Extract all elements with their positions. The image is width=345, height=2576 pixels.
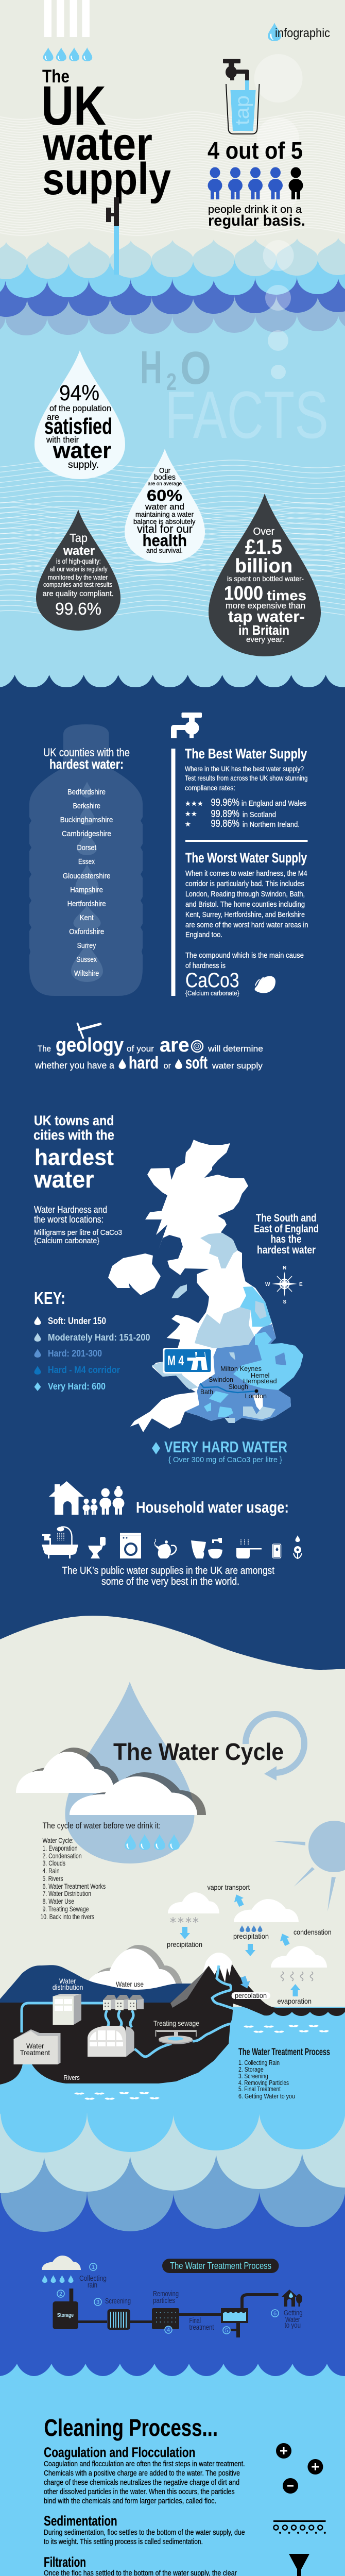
fact drop: bottled water cost: billion [235, 555, 292, 577]
text: worst water description: and Bristol. The home counties including [185, 901, 305, 909]
step 4: removing particles: particles [153, 2296, 175, 2305]
callout: very hard water: { Over 300 mg of CaCo3 per litre } [168, 1455, 282, 1464]
steam squiggles [281, 1972, 313, 1981]
four water drops [43, 47, 92, 61]
fact drop: bodies 60% water: health [142, 531, 187, 550]
icon: filter funnel [289, 2554, 309, 2576]
text: cycle of water list: 1. Evaporation [42, 1844, 77, 1852]
step 1: collecting rain [42, 2256, 107, 2290]
legend: key: KEY: [34, 1289, 65, 1308]
labels: condensation [294, 1928, 332, 1936]
block: coagulation: other dissolved particles in the water. When this occurs, the particles [44, 2488, 235, 2496]
icon: title tap and water stream [106, 197, 119, 275]
panel: best and worst water supply: Test results from across the UK show stunning [185, 774, 308, 782]
rising bubbles [254, 54, 303, 379]
text: geology statement: The [38, 1044, 51, 1054]
text: cycle of water list: 4. Rain [42, 1867, 60, 1875]
building: water distribution: Water [59, 1977, 76, 1985]
large scallop rows [0, 2069, 345, 2232]
text: worst water description: are some of the worst hard water areas in [185, 921, 308, 929]
heading: household water usage: Household water usage: [136, 1498, 289, 1516]
title pill [162, 2259, 279, 2273]
text: cycle of water list: 2. Condensation [42, 1852, 81, 1860]
labels [167, 1883, 332, 2005]
stat: 4 out of 5: 4 out of 5 [208, 137, 303, 164]
arrows [180, 1892, 301, 1996]
key item: M4 corridor: Hard - M4 corridor [48, 1365, 120, 1375]
compliance rates with stars: ★ [185, 820, 191, 828]
text: geology statement: of your [127, 1044, 154, 1054]
fact drop: bodies 60% water: bodies [154, 473, 176, 482]
list: counties: Essex [78, 857, 95, 866]
navy section scalloped top [0, 675, 345, 690]
heading: H2O FACTS [140, 342, 329, 452]
text: worst water description: When it comes to water hardness, the M4 [185, 870, 307, 878]
fact drop: 94% satisfied: with their [46, 435, 79, 445]
block: coagulation: charge of these chemicals neutralizes the negative charge of dirt and [44, 2479, 239, 2487]
text: geology statement: geology [56, 1035, 124, 1056]
text: worst water description: of hardness is [185, 962, 226, 970]
fact drop: bodies 60% water: are on average [148, 481, 182, 487]
fact drop: bottled water cost: tap water- [228, 607, 305, 625]
text: cycle of water list: The cycle of water before we drink it: [42, 1821, 161, 1831]
fact drop: bodies 60% water: vital for our [137, 522, 193, 535]
clouds over title drop [16, 1748, 206, 1815]
title: supply [42, 154, 171, 204]
key item: moderately hard: Moderately Hard: 151-200 [48, 1332, 150, 1343]
fact drop: bottled water cost: is spent on bottled water- [227, 574, 304, 583]
step 3: screening [94, 2297, 131, 2330]
list: counties: Sussex [76, 955, 97, 964]
compliance rates with stars: ★ [191, 810, 197, 818]
list: counties: Buckinghamshire [60, 816, 113, 824]
icon: sedimentation [273, 2520, 326, 2534]
block: sedimentation: to its weight. This settling process is called sedimentation. [44, 2538, 203, 2546]
land and mountain [0, 1955, 345, 2084]
block: coagulation: Coagulation and Flocculation [44, 2445, 196, 2460]
text: cycle of water list: 10. Back into the rivers [41, 1912, 94, 1921]
icon: compass: E [299, 1282, 303, 1287]
building: sewage works [88, 2026, 134, 2057]
block: coagulation [44, 2445, 245, 2505]
block: sedimentation [44, 2513, 245, 2546]
step 1: collecting rain: Collecting [79, 2274, 107, 2283]
fact drop: bottled water cost: times [267, 588, 306, 603]
icon: compass: W [265, 1282, 270, 1287]
text: cycle of water list: 7. Water Distribution [42, 1889, 91, 1897]
heading: UK towns hardest water: cities with the [33, 1127, 114, 1143]
fact drop: 94% satisfied [34, 350, 125, 479]
fact drop: bodies 60% water: Our [159, 466, 170, 475]
icon: flower and drop [294, 1535, 302, 1558]
fact drop: 94% satisfied: supply. [68, 460, 99, 470]
stat: 4 out of 5: regular basis. [208, 212, 305, 229]
icon: compass [265, 1265, 303, 1305]
text: geology statement: hard [129, 1053, 159, 1072]
panel: best and worst water supply: Where in the UK has the best water supply? [185, 765, 304, 773]
heading: UK counties: hardest water: [49, 756, 124, 772]
text: water treatment process list: 2. Storage [238, 2065, 264, 2073]
city labels: Hemel [251, 1371, 270, 1379]
small drops inside bottle [71, 782, 103, 982]
mountain snow cap and highlight [170, 1953, 232, 2008]
text: cycle of water list [41, 1821, 161, 1921]
text: UK public water supplies: some of the very best in the world. [101, 1576, 239, 1587]
icon: sun [271, 1821, 345, 1911]
title: UK [41, 74, 106, 137]
key item: very hard: Very Hard: 600 [48, 1381, 106, 1392]
white falling bars [44, 0, 90, 37]
step 6: getting water to you: Getting [284, 2309, 303, 2317]
logo: infographic: infographic [275, 26, 330, 40]
icon: geology hammer [77, 1023, 101, 1039]
block: sedimentation: Sedimentation [44, 2513, 117, 2529]
fact drop: tap water quality: companies and test results [43, 581, 112, 588]
fact drop: bottled water cost: in Britain [238, 622, 289, 638]
text: water treatment process list: 4. Removing Particles [238, 2079, 289, 2087]
key item: hard: Hard: 201-300 [48, 1348, 102, 1359]
step 4: removing particles [152, 2290, 179, 2333]
heading: UK towns hardest water: Milligrams per litre of CaCo3 [34, 1228, 122, 1237]
heading: H2O FACTS: H [140, 342, 162, 394]
heading: UK towns hardest water: Water Hardness and [34, 1205, 107, 1215]
big cloud behind hill [83, 1945, 183, 1997]
compliance rates with stars: ★ [185, 800, 191, 807]
white wave lines [0, 460, 345, 618]
compliance rates with stars: 99.86% [211, 818, 239, 829]
text: worst water description: The compound which is the main cause [185, 952, 304, 960]
text: cycle of water list: 8. Water Use [42, 1897, 74, 1905]
step 6: getting water to you: 6 [273, 2311, 277, 2317]
icon: fridge [273, 1544, 281, 1558]
text: worst water description: London, Reading through Swindon, Bath, [185, 890, 305, 899]
M4 route [200, 1383, 256, 1393]
list: counties: Dorset [77, 843, 97, 852]
stat: 4 out of 5 [208, 137, 305, 229]
step 2: storage: 2 [59, 2291, 62, 2297]
fact drop: bodies 60% water: and survival. [146, 546, 183, 554]
label: percolation and arrow [232, 1975, 270, 1999]
step 6: getting water to you [271, 2290, 303, 2330]
rain drops [240, 1925, 263, 1932]
process diagram [42, 2256, 303, 2337]
fact drop: bottled water cost: Over [253, 526, 274, 537]
cyan section scalloped top [0, 2364, 345, 2380]
fact drop: bodies 60% water: 60% [147, 486, 182, 504]
step 6: getting water to you: to you [285, 2321, 301, 2330]
heading: UK towns hardest water: water [33, 1166, 94, 1193]
fact drop: 94% satisfied: of the population [49, 403, 111, 413]
building: water treatment [13, 2029, 61, 2064]
heading: Cleaning Process... [44, 2414, 218, 2441]
diagram: water cycle clouds and labels [167, 1883, 332, 2005]
icon: spiral a [192, 1041, 203, 1052]
text: UK public water supplies [62, 1565, 274, 1587]
water cycle big drop [65, 1682, 195, 1863]
scallop water rows [0, 238, 345, 335]
block: filtration [43, 2554, 237, 2576]
fact drop: bodies 60% water [125, 449, 205, 563]
block: coagulation: Chemicals with a positive charge are added to the water. The positive [44, 2469, 240, 2478]
text: water treatment process list: 6. Getting Water to you [238, 2092, 295, 2100]
step 4: removing particles: 4 [167, 2327, 170, 2333]
label: rivers: Rivers [64, 2074, 80, 2081]
heading: UK counties [43, 746, 130, 772]
building: water distribution [53, 1977, 83, 2025]
title: water [42, 118, 152, 170]
step 2: storage [53, 2289, 78, 2329]
fact drop: tap water quality: all our water is regularly [50, 565, 108, 573]
icons: household water uses [42, 1527, 302, 1558]
heading: UK towns hardest water: {Calcium carbonate} [34, 1236, 99, 1245]
callout: very hard water [152, 1438, 287, 1464]
label: percolation and arrow: percolation [235, 1991, 267, 1999]
map: UK water hardness [108, 1140, 303, 1432]
list: counties [60, 788, 113, 978]
fact drop: bottled water cost: more expensive than [226, 601, 305, 611]
panel: best and worst water supply [171, 746, 308, 997]
list: counties: Wiltshire [74, 969, 99, 978]
text: geology statement: whether you have a [34, 1060, 115, 1071]
step 5: final treatment [189, 2295, 279, 2337]
fact drop: bodies 60% water: maintaining a water [135, 510, 194, 518]
wave stripes on beige [0, 112, 345, 235]
fact drop: tap water quality: monitored by the water [48, 573, 108, 581]
heading: UK towns hardest water: UK towns and [34, 1113, 114, 1128]
callout: south and east: hardest water [257, 1244, 316, 1256]
icon: teapot [154, 1539, 176, 1558]
step 5: final treatment: treatment [189, 2323, 214, 2332]
fact drop: 94% satisfied: water [53, 438, 111, 463]
navy hill [0, 1965, 194, 2007]
city labels [200, 1365, 277, 1400]
list: counties: Oxfordshire [69, 927, 104, 936]
heading: worst water supply: The Worst Water Supply [185, 850, 307, 866]
panel: best and worst water supply: compliance rates: [185, 784, 235, 792]
compliance rates with stars: ★ [185, 810, 191, 818]
text: water treatment process list: 5. Final Treatment [238, 2085, 281, 2093]
building: water distribution: distribution [53, 1983, 83, 1991]
icon: saucepan [236, 1539, 262, 1558]
M4 motorway sign [163, 1348, 213, 1374]
labels: evaporation [277, 1997, 312, 2005]
step 5: final treatment: 5 [225, 2328, 228, 2334]
title pill: The Water Treatment Process [170, 2261, 271, 2271]
city labels: Hempstead [243, 1377, 277, 1385]
text: geology statement: will determine [208, 1044, 263, 1054]
fact drop: 94% satisfied: are [47, 412, 59, 422]
fact drop: tap water quality: are quality compliant. [42, 589, 114, 598]
building: water treatment: Treatment [20, 2048, 50, 2057]
fact drop: tap water quality [36, 510, 120, 631]
text: UK public water supplies: The UK’s public water supplies in the UK are amongst [62, 1565, 274, 1577]
icon: sink [88, 1537, 106, 1558]
list: counties: Surrey [77, 941, 96, 950]
logo: infographic [268, 23, 330, 41]
text: worst water description: Kent, Surrey, Hertfordshire, and Berkshire [185, 911, 305, 919]
text: cycle of water list: 3. Clouds [42, 1859, 65, 1867]
compliance rates with stars: in England and Wales [242, 799, 306, 808]
text: cycle of water list: 5. Rivers [42, 1874, 63, 1883]
labels: precipitation [233, 1932, 269, 1940]
icon: charges [276, 2443, 323, 2494]
city labels: Milton Keynes [220, 1365, 262, 1372]
step 3: screening: 3 [96, 2299, 99, 2306]
icon: cycle arrow [246, 1714, 304, 1781]
step 4: removing particles: Removing [153, 2290, 179, 2298]
icon row: five people [208, 167, 303, 199]
callout: south and east: East of England [254, 1223, 319, 1235]
step 3: screening: Screening [105, 2297, 131, 2306]
city labels: Slough [229, 1383, 248, 1391]
list: counties: Bedfordshire [67, 788, 106, 796]
city labels: London [245, 1392, 267, 1400]
heading: The Water Cycle: The Water Cycle [113, 1738, 284, 1765]
snow [170, 1917, 198, 1923]
compliance rates with stars: in Northern Ireland. [243, 820, 300, 829]
fact drop: tap water quality: Tap [70, 531, 88, 545]
stat: 4 out of 5: people drink it on a [208, 204, 302, 215]
city labels: Swindon [209, 1376, 233, 1383]
compliance rates with stars: ★ [191, 800, 197, 807]
text: worst water description [185, 870, 308, 970]
fact drop: bodies 60% water: water and [145, 502, 184, 512]
pipes between tanks [78, 2313, 221, 2323]
list: counties: Hampshire [70, 886, 103, 894]
compliance rates with stars [185, 797, 306, 829]
fact drop: tap water quality: is of high-quality: [56, 557, 101, 565]
text: worst water description: corridor is particularly bad. This includes [185, 880, 304, 888]
river [212, 1965, 252, 2014]
icon: compass: N [283, 1265, 286, 1271]
icon: white tap [171, 713, 202, 738]
heading: best water supply: The Best Water Supply [185, 746, 307, 761]
labels: precipitation [167, 1940, 202, 1948]
fact drop: bottled water cost: £1.5 [245, 536, 282, 558]
panel: best and worst water supply: {Calcium carbonate} [185, 989, 239, 997]
callout: very hard water: VERY HARD WATER [164, 1438, 287, 1456]
compliance rates with stars: 99.89% [211, 808, 239, 820]
title: The [42, 66, 70, 87]
callout: south and east: The South and [256, 1212, 316, 1224]
labels: vapor transport [208, 1883, 250, 1891]
icon: tap filling glass [223, 59, 260, 134]
block: coagulation: bind with the chemicals and form larger particles, called floc. [44, 2497, 216, 2505]
text: water treatment process list: 1. Collecting Rain [238, 2059, 280, 2066]
icon: bath and shower [42, 1527, 78, 1558]
fact drop: tap water quality: 99.6% [55, 599, 101, 618]
panel: best and worst water supply: CaCo3 [185, 969, 239, 992]
icon: shell [255, 976, 275, 993]
heading: UK counties: UK counties with the [43, 746, 130, 759]
panel: cleaning process text [43, 2414, 248, 2576]
list: counties: Berkshire [73, 802, 100, 810]
icon: washing machine [120, 1533, 141, 1558]
step 1: collecting rain: 1 [92, 2264, 95, 2270]
block: sedimentation: During sedimentation, floc settles to the bottom of the water supply, due [44, 2529, 245, 2537]
treating sewage tank: Treating sewage [153, 2019, 199, 2027]
text: geology statement: soft [185, 1053, 208, 1072]
heading: UK towns hardest water: the worst locations: [34, 1214, 104, 1225]
icon: tap filling glass: tap [232, 95, 253, 125]
heading: H2O FACTS: 2 [166, 368, 177, 395]
step 2: storage: Storage [57, 2312, 74, 2318]
compliance rates with stars: 99.96% [211, 797, 239, 808]
city labels: Bath [200, 1388, 213, 1396]
buildings: houses: Water use [116, 1980, 144, 1988]
fact drop: tap water quality: water [63, 544, 95, 558]
text: geology statement: are [160, 1035, 189, 1056]
callout: south and east: has the [271, 1233, 302, 1245]
four cyan drops [125, 1834, 180, 1850]
M4 motorway sign: M 4 [167, 1353, 184, 1368]
legend: key [34, 1289, 150, 1392]
icon: compass: S [283, 1299, 286, 1305]
treating sewage tank [153, 2019, 199, 2044]
heading: UK towns hardest water [33, 1113, 122, 1245]
block: filtration: Filtration [44, 2554, 86, 2570]
heading: H2O FACTS: O [180, 343, 211, 394]
water pipes [22, 2003, 231, 2057]
fact drop: bottled water cost: 1000 [224, 583, 263, 604]
text: cycle of water list: 9. Treating Sewage [42, 1905, 89, 1913]
text: worst water description: England too. [185, 931, 222, 939]
icon: house and family [49, 1481, 124, 1515]
list: counties: Gloucestershire [63, 872, 110, 880]
key item: soft: Soft: Under 150 [48, 1316, 106, 1326]
text: geology statement [34, 1035, 263, 1072]
text: geology statement: or [164, 1061, 171, 1071]
title [41, 66, 171, 204]
compliance rates with stars: ★ [197, 800, 203, 807]
step 6: getting water to you: Water [285, 2315, 300, 2324]
buildings: houses [103, 1980, 144, 2010]
list: counties: Kent [80, 913, 94, 922]
compliance rates with stars: in Scotland [243, 810, 276, 819]
list: counties: Cambridgeshire [62, 829, 111, 838]
text: cycle of water list: Water Cycle: [42, 1836, 74, 1844]
callout: south and east [254, 1212, 319, 1256]
text: water treatment process list [238, 2047, 330, 2100]
building: water treatment: Water [26, 2042, 44, 2050]
ocean wave marks [74, 2025, 329, 2100]
step 5: final treatment: Final [189, 2316, 201, 2325]
step 1: collecting rain: rain [88, 2281, 97, 2290]
panel: bottle of hardest water counties [29, 724, 143, 996]
text: cycle of water list: 6. Water Treatment Works [42, 1882, 106, 1890]
text: geology statement: water supply [212, 1061, 263, 1071]
fact drop: bottled water cost: every year. [246, 635, 284, 644]
fact drop: bottled water cost [209, 494, 321, 656]
list: counties: Hertfordshire [67, 900, 106, 908]
text: water treatment process list: 3. Screening [238, 2072, 268, 2080]
heading: UK towns hardest water: hardest [34, 1145, 114, 1170]
fact drop: 94% satisfied: 94% [59, 381, 99, 405]
icon: cups and bowl [191, 1538, 222, 1558]
block: coagulation: Coagulation and flocculation are often the first steps in water treatment. [44, 2460, 245, 2468]
fact drop: bodies 60% water: balance is absolutely [133, 517, 196, 526]
fact drop: 94% satisfied: satisfied [44, 414, 112, 439]
